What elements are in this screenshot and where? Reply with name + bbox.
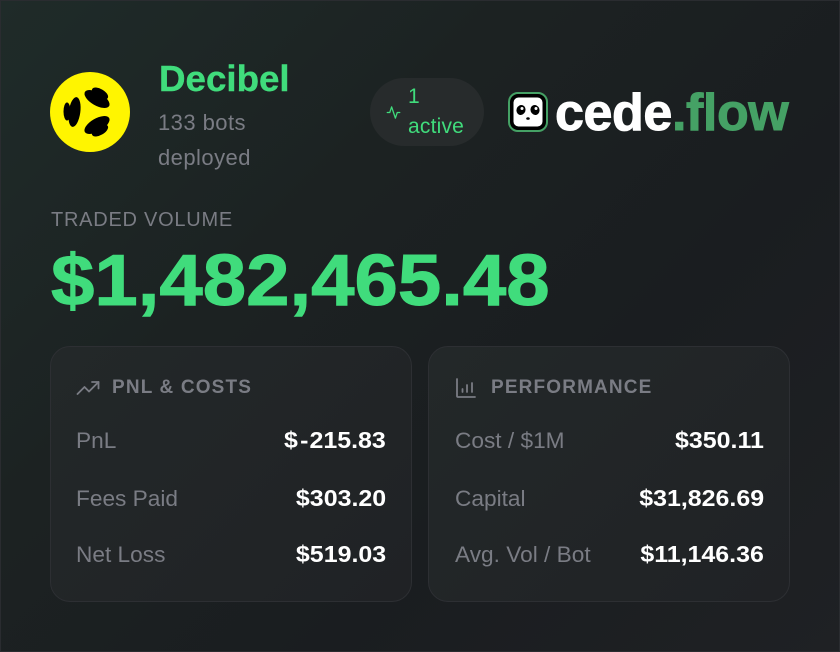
heading: PERFORMANCE (491, 377, 652, 398)
wordmark: cede.flow (555, 84, 788, 142)
heading: PNL & COSTS (112, 377, 252, 398)
panel: PnL and costs: $519.03 (296, 541, 386, 567)
row: Avg. Vol per Bot: Avg. Vol / Bot (455, 542, 591, 567)
cede.flow logo (508, 84, 790, 142)
row: Net Loss: Net Loss (76, 542, 165, 567)
icon: activity pulse (386, 106, 400, 119)
row: Fees Paid: Fees Paid (76, 486, 178, 511)
icon: bar chart (456, 378, 476, 398)
active count text: 1 (408, 85, 420, 108)
project name: Decibel (159, 58, 290, 99)
header: project identity (50, 58, 290, 170)
panel: performance: $31,826.69 (639, 485, 764, 511)
traded volume label: TRADED VOLUME (51, 209, 233, 231)
panel: performance: $11,146.36 (640, 541, 764, 567)
row: PnL: PnL (76, 428, 116, 453)
panel: PnL and costs: $-215.83 (284, 427, 386, 453)
bots deployed text: 133 bots deployed (158, 110, 251, 170)
active count text: active (408, 115, 464, 138)
icon: Decibel logo (50, 72, 130, 152)
active count text (408, 85, 464, 138)
traded volume amount: $1,482,465.48 (51, 241, 550, 321)
panel: performance (428, 346, 790, 602)
panel: PnL and costs: $303.20 (296, 485, 386, 511)
row: Capital: Capital (455, 486, 526, 511)
active badge (370, 78, 484, 146)
panel: performance: $350.11 (675, 427, 764, 453)
panel: PnL and costs (50, 346, 412, 602)
icon: panda face (508, 92, 548, 132)
row: Cost per $1M: Cost / $1M (455, 428, 565, 453)
icon: trending up (76, 381, 100, 395)
